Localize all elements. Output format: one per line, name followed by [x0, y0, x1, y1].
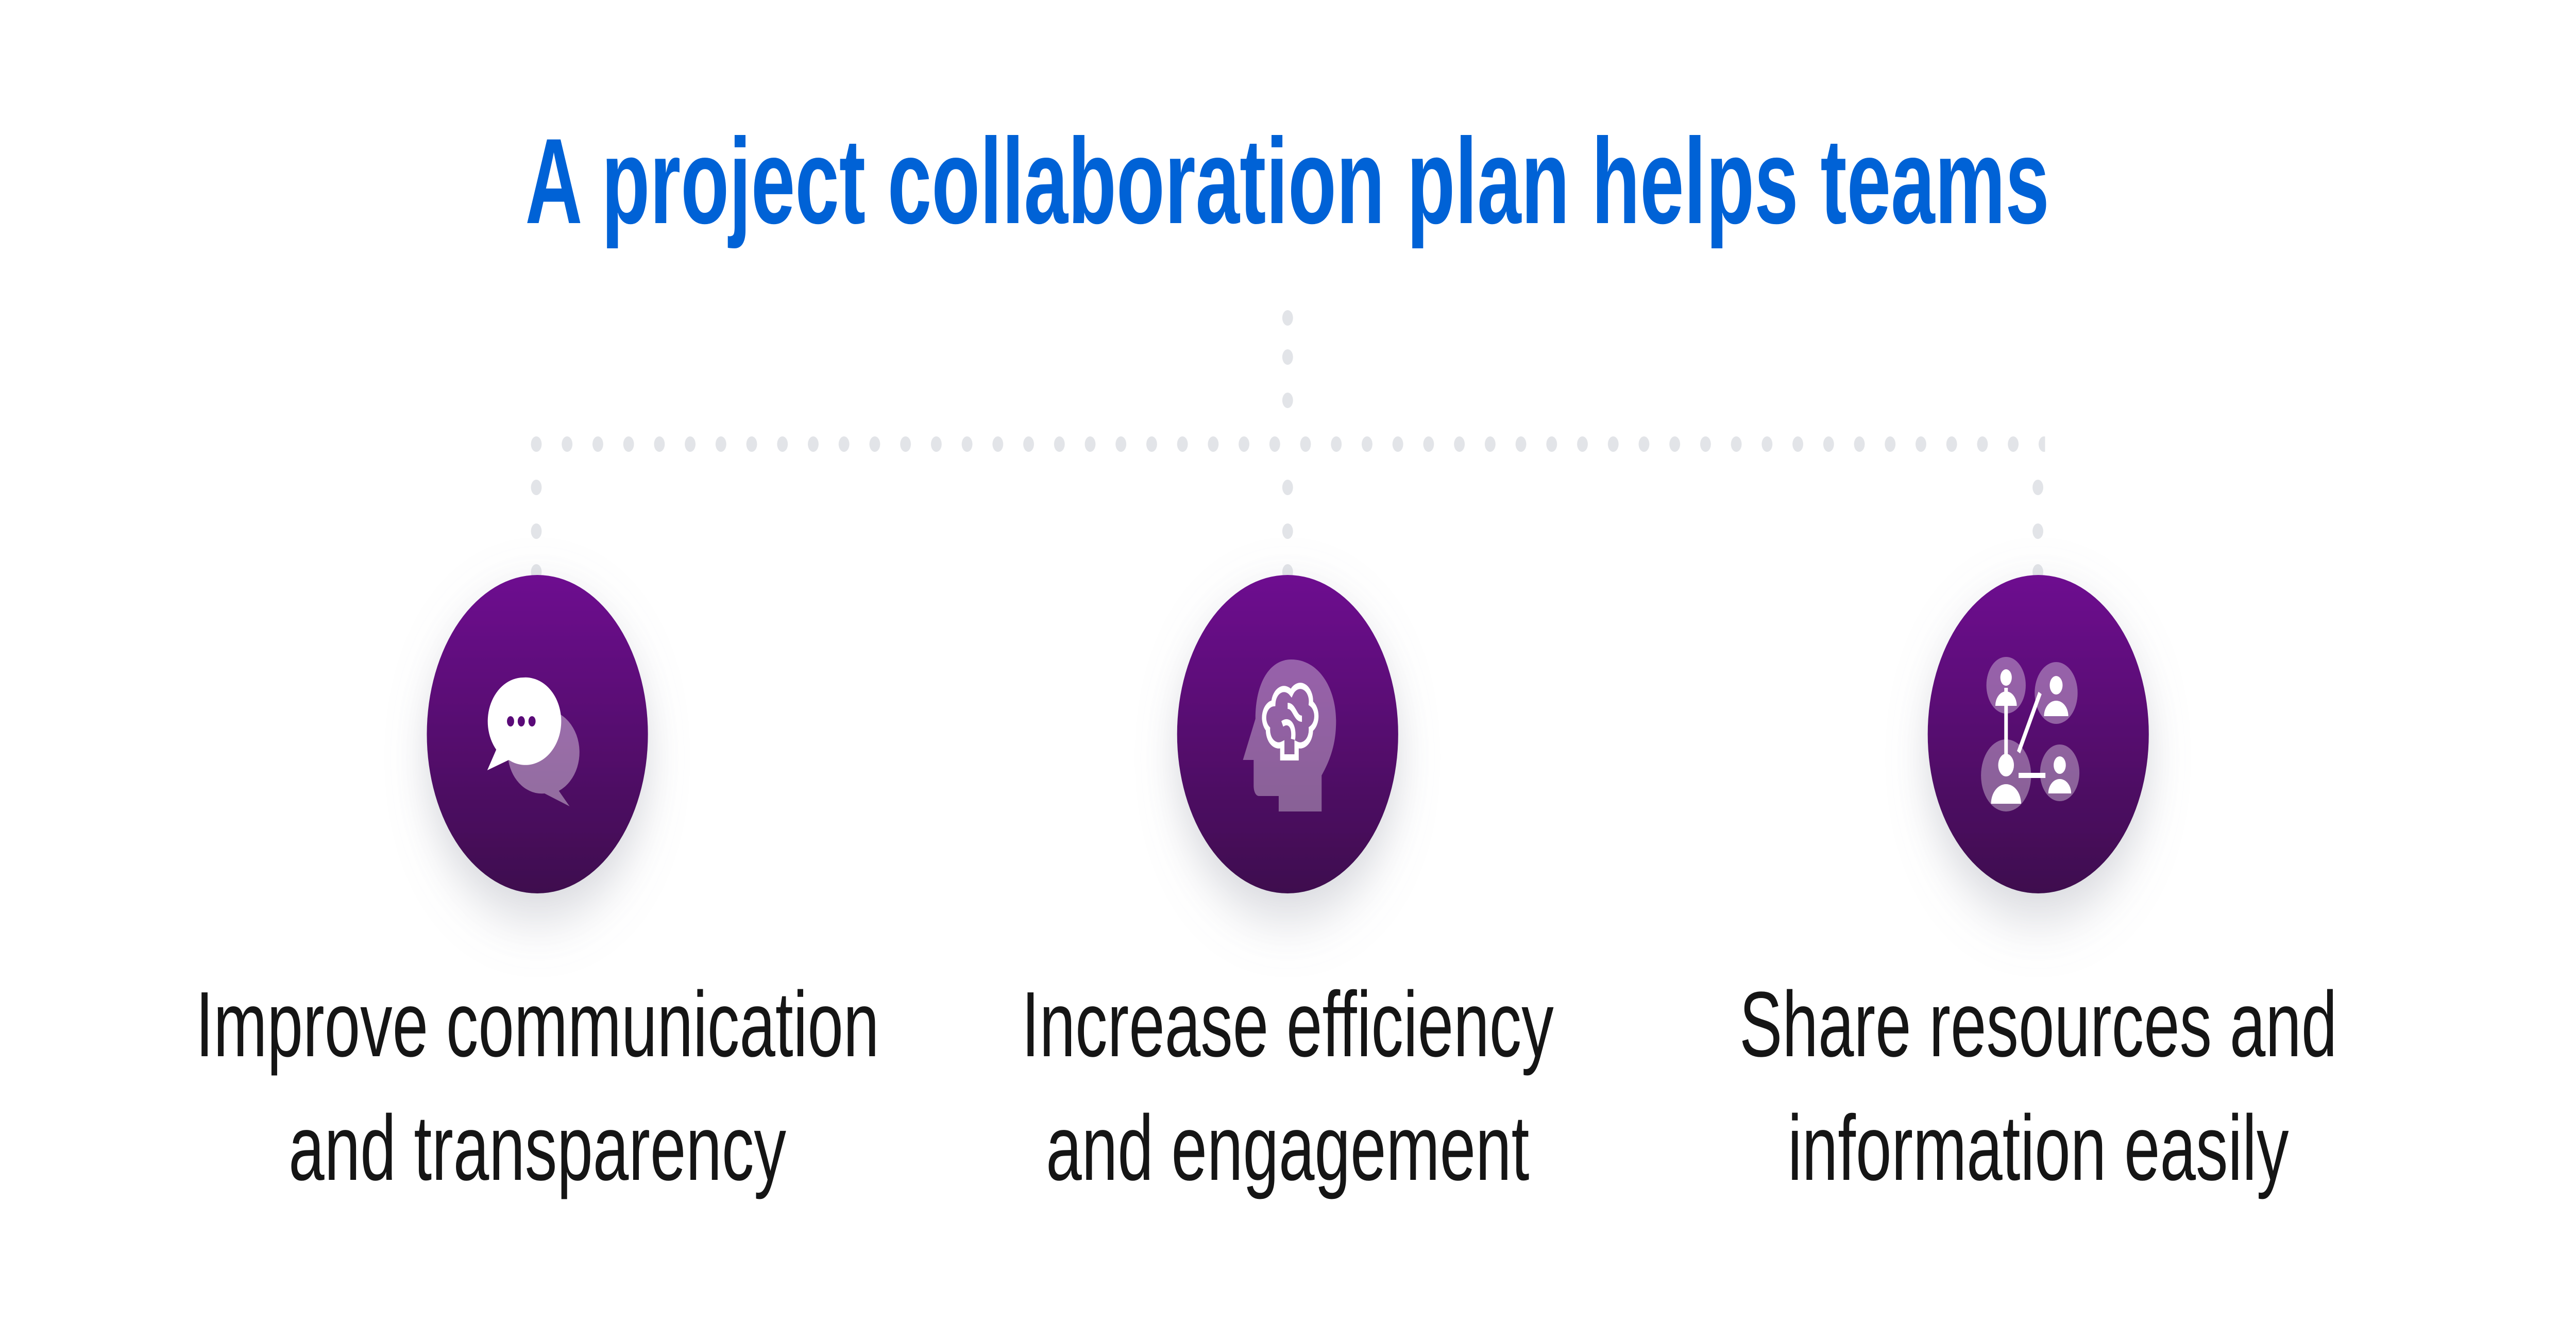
item: communication: and transparency: [289, 1096, 786, 1199]
item: sharing: [1739, 575, 2337, 1199]
icon circle: head with brain: [1177, 575, 1398, 893]
item: sharing: information easily: [1788, 1096, 2289, 1199]
item: efficiency: and engagement: [1046, 1096, 1529, 1199]
label: Increase efficiency: [1022, 972, 1554, 1076]
icon circle: chat bubbles: [427, 575, 648, 893]
dotted connector lines: [530, 310, 2045, 580]
icon circle: network of people: [1928, 575, 2149, 893]
item: efficiency: [1022, 575, 1554, 1199]
title: A project collaboration plan helps teams: [525, 113, 2049, 249]
label: Improve communication: [196, 972, 879, 1076]
label: Share resources and: [1739, 972, 2337, 1076]
item: communication: [196, 575, 879, 1199]
